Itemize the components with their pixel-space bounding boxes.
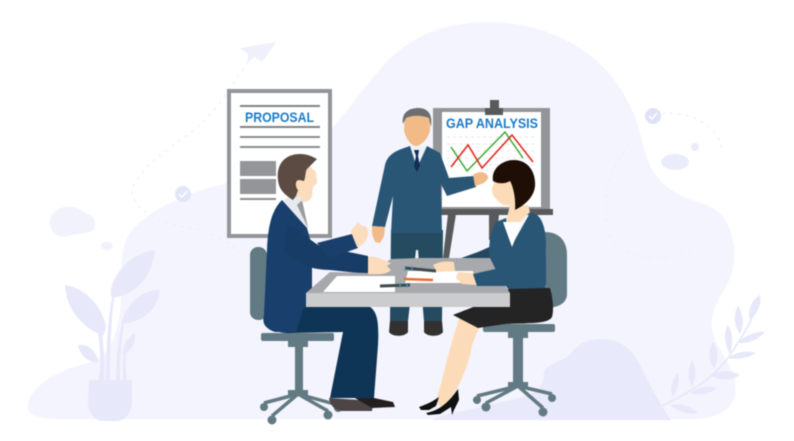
flip chart easel [433, 100, 553, 258]
woman arm [473, 232, 546, 286]
presenter hair [403, 108, 431, 127]
pen dark front [380, 283, 410, 288]
woman shirt [503, 222, 522, 247]
woman neck [506, 205, 530, 222]
presenter tie [414, 150, 420, 172]
table top surface [306, 258, 510, 293]
proposal document [229, 91, 330, 236]
plant pot [88, 380, 132, 421]
easel legs [443, 214, 499, 258]
woman face [492, 175, 515, 206]
chair seat [261, 333, 334, 341]
man arm [284, 226, 368, 274]
oval right [661, 154, 689, 170]
left paper [323, 276, 395, 292]
right paper [405, 271, 476, 283]
presenter shirt [409, 145, 428, 165]
plant [65, 250, 160, 421]
paper plane icon [240, 42, 276, 63]
man hair [278, 154, 317, 200]
chair seat [483, 324, 555, 332]
green line [451, 132, 523, 171]
man jacket [263, 200, 312, 332]
chair base [477, 386, 552, 408]
small dot right [691, 143, 699, 151]
woman leg [436, 316, 479, 407]
dotted routes [132, 62, 722, 262]
man neck and face [289, 160, 317, 202]
chair column [295, 347, 303, 392]
background hill [432, 339, 671, 420]
man hands [351, 222, 391, 274]
woman shoes [419, 389, 459, 415]
chair column [513, 338, 523, 384]
easel ledge [440, 209, 553, 215]
presenter jacket [372, 146, 476, 233]
right chair [473, 232, 567, 416]
branch right [662, 295, 765, 414]
woman skirt [453, 288, 553, 328]
standing presenter [372, 108, 488, 336]
seated man [263, 154, 395, 411]
chair back [545, 232, 567, 308]
man shirt [283, 190, 308, 228]
man shoes [329, 398, 373, 411]
check badge right [645, 108, 661, 124]
chart heading: GAP ANALYSIS [446, 115, 538, 131]
man collar and tie [297, 200, 308, 228]
chair base [264, 394, 338, 416]
woman hands over table [433, 261, 477, 285]
presenter hands [372, 172, 488, 243]
man trousers [264, 300, 378, 398]
chart grid [447, 137, 537, 165]
presenter shoes [389, 321, 443, 336]
check badge left [175, 186, 191, 202]
branch leaves [670, 295, 765, 414]
seated woman [419, 160, 553, 415]
proposal heading: PROPOSAL [245, 109, 314, 125]
branch stem [662, 313, 754, 406]
presenter legs [390, 230, 443, 321]
presenter face [404, 115, 430, 146]
plant leaves [65, 250, 160, 382]
table front edge [306, 293, 510, 307]
red line [451, 135, 533, 168]
cloud left [50, 207, 95, 237]
pen orange [404, 279, 433, 280]
board frame [433, 108, 550, 209]
man raised arm [317, 234, 358, 258]
pen dark back [405, 266, 436, 271]
meeting table [306, 257, 510, 307]
chair back [250, 247, 267, 320]
woman far arm [453, 238, 515, 270]
small oval left [101, 242, 113, 250]
woman hair [493, 160, 535, 210]
left chair [250, 247, 342, 424]
board clip [485, 100, 503, 115]
woman sleeve over table [473, 268, 510, 286]
man hand over table [368, 257, 391, 274]
woman jacket [489, 213, 546, 289]
